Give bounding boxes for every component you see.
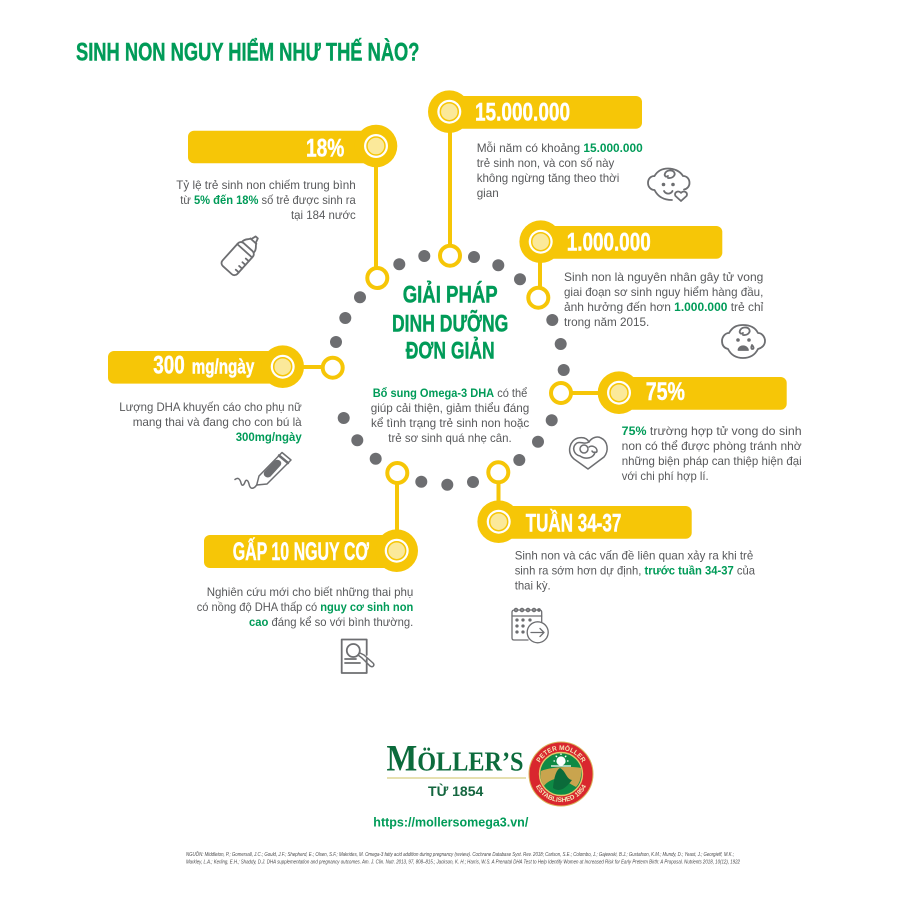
source notes [186,851,740,866]
text: 300 mg/ngày: 300mg/ngày [236,430,302,444]
badge: GẤP 10 NGUY CƠ [204,529,418,572]
center description [371,386,529,445]
ring nodes on the circle [323,246,571,483]
text: 1.000.000: giai đoạn sơ sinh nguy hiểm hàng đầu, [564,285,763,299]
text: 300 mg/ngày: Lượng DHA khuyến cáo cho phụ nữ [119,400,302,414]
badge: 18%: 18% [306,135,344,163]
badge: 75% [598,371,787,414]
badge: 1.000.000 [519,220,722,263]
text: 15.000.000: Mỗi năm có khoảng 15.000.000 [477,140,643,155]
badge: 75%: 75% [646,378,685,406]
icon: document with magnifier [342,640,374,673]
badge: GẤP 10 NGUY CƠ: GẤP 10 NGUY CƠ [233,537,369,566]
icon: fetus in heart [570,437,607,469]
text: GẤP 10 NGUY CƠ: cao đáng kể so với bình thường. [249,615,413,629]
text: 15.000.000: gian [477,186,499,200]
source notes: NGUỒN: Middleton, P.; Gomersall, J.C.; Gould, J.F.; Shepherd, E.; Olsen, S.F.; Makrides, M. Omega-3 fatty acid addition during pregnancy (review). Cochrane Database Syst. Rev. 2018; Carlson, S.E.; Colombo, J.; Gajewski, B.J.; Gustafson, K.M.; Mundy, D.; Yeast, J.; Georgieff, M.K.; [186,851,735,858]
text: 1.000.000: Sinh non là nguyên nhân gây tử vong [564,270,763,284]
center heading [392,280,508,364]
badge: 300 mg/ngày [108,345,304,388]
text: GẤP 10 NGUY CƠ [197,585,413,629]
icon: pen [235,452,291,488]
center description: kể tình trạng trẻ sinh non hoặc [371,416,529,430]
text: 15.000.000: không ngừng tăng theo thời [477,171,619,185]
badge: 15.000.000 [428,90,642,133]
text: 300 mg/ngày: mang thai và đang cho con bú là [133,415,302,429]
text: 18% [176,178,356,222]
website url: https://mollersomega3.vn/ [373,814,529,830]
panel: GẤP 10 NGUY CƠ [197,529,418,673]
title: SINH NON NGUY HIỂM NHƯ THẾ NÀO? [76,38,420,66]
panel: 1.000.000 [519,220,765,358]
text: 1.000.000: trong năm 2015. [564,315,649,329]
text: TUẦN 34-37 [515,548,755,592]
text: TUẦN 34-37: Sinh non và các vấn đề liên quan xảy ra khi trẻ [515,548,754,562]
panel: 75% [570,371,802,483]
text: 75%: với chi phí hợp lí. [622,469,709,483]
text: 300 mg/ngày [119,400,302,444]
badge: 18% [188,125,397,167]
center description: trẻ sơ sinh quá nhẹ cân. [388,431,512,445]
badge: 300 mg/ngày: 300 [153,351,185,379]
center heading: DINH DƯỠNG [392,310,508,338]
text: GẤP 10 NGUY CƠ: có nồng độ DHA thấp có nguy cơ sinh non [197,600,413,614]
text: TUẦN 34-37: thai kỳ. [515,578,551,592]
text: TUẦN 34-37: sinh ra sớm hơn dự định, trước tuần 34-37 của [515,564,755,578]
center heading: ĐƠN GIẢN [406,336,495,364]
seal [528,742,594,806]
wordmark: TỪ 1854 [428,784,484,799]
text: 1.000.000 [564,270,764,329]
text: 18%: Tỷ lệ trẻ sinh non chiếm trung bình [176,178,356,192]
text: 15.000.000 [477,140,643,200]
wordmark: MÖLLER’S [386,739,524,780]
icon: crying baby [722,325,765,358]
logo: Möller's [386,739,594,806]
panel: 300 mg/ngày [108,345,304,488]
center heading: GIẢI PHÁP [403,280,498,309]
panel: 15.000.000 [428,90,690,201]
icon: baby bottle [220,231,264,277]
text: 75%: những biện pháp can thiệp hiện đại [622,454,802,468]
text: 18%: từ 5% đến 18% số trẻ được sinh ra [180,193,356,207]
panel: center solution [371,280,529,445]
badge: TUẦN 34-37 [477,500,692,543]
dotted circle [330,250,570,491]
icon: smiling baby [648,168,690,201]
seal: ESTABLISHED 1854 [536,784,586,802]
wordmark [386,739,526,799]
panel: 18% [176,125,397,277]
badge: TUẦN 34-37: TUẦN 34-37 [526,509,621,538]
text: 1.000.000: ảnh hưởng đến hơn 1.000.000 trẻ chỉ [564,300,764,314]
icon: calendar with arrow [512,608,548,643]
source notes: Markley, L.A.; Kerling, E.H.; Shaddy, D.J. DHA supplementation and pregnancy outcomes. Am. J. Clin. Nutr. 2013, 97, 808–815.; Jackson, K. H.; Harris, W.S. A Prenatal DHA Test to Help Identify Women at Increased Risk for Early Preterm Birth: A Proposal. Nutrients 2018, 10(12), 1922 [186,860,740,866]
connector lines [283,125,619,535]
text: 18%: tại 184 nước [291,208,356,222]
badge: 1.000.000: 1.000.000 [567,228,651,256]
text: 75% [622,424,802,483]
seal: PETER MÖLLER [536,745,586,763]
text: 75%: 75% trường hợp tử vong do sinh [622,424,802,438]
center description: Bổ sung Omega-3 DHA có thể [373,386,528,400]
text: 15.000.000: trẻ sinh non, và con số này [477,156,614,170]
text: GẤP 10 NGUY CƠ: Nghiên cứu mới cho biết những thai phụ [207,585,413,599]
text: 75%: non có thể được phòng tránh nhờ [622,439,802,453]
badge: 15.000.000: 15.000.000 [475,99,570,127]
center description: giúp cải thiện, giảm thiểu đáng [371,401,529,415]
panel: TUẦN 34-37 [477,500,755,643]
badge: 300 mg/ngày: mg/ngày [192,356,255,378]
